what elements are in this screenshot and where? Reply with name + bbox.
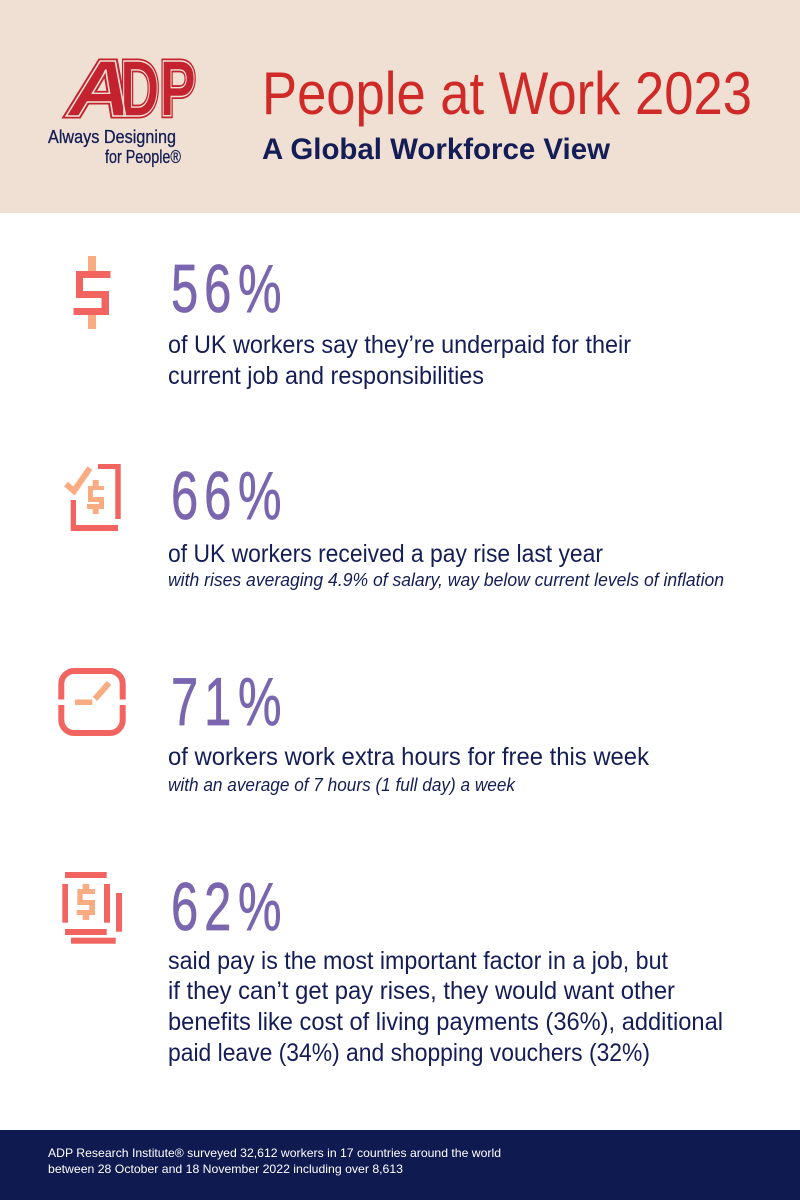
- panel: extra hours stat: [61, 663, 649, 795]
- text: extra hours: with an average of 7 hours (1 full day) a week: [168, 775, 516, 795]
- panel: footer: [0, 1130, 800, 1200]
- text: pay importance: [168, 947, 723, 1067]
- logo tagline: for People®: [105, 147, 181, 167]
- number: 66%: 66%: [171, 457, 281, 534]
- text: underpaid: current job and responsibilities: [168, 362, 484, 390]
- icon: clock: [61, 671, 123, 733]
- icon: dollar sign: [74, 256, 110, 329]
- logo tagline: [48, 127, 181, 167]
- number: 56%: 56%: [171, 250, 281, 327]
- panel: header: [0, 0, 800, 213]
- number: 71%: 71%: [171, 663, 281, 740]
- panel: underpaid stat: [74, 250, 631, 390]
- panel: pay rise stat: [66, 457, 724, 590]
- logo: ADP: DP: [120, 44, 196, 133]
- text: extra hours: [168, 743, 649, 795]
- logo: ADP: A: [66, 44, 132, 133]
- logo tagline: Always Designing: [48, 127, 176, 147]
- footer note: ADP Research Institute® surveyed 32,612 workers in 17 countries around the world: [48, 1146, 501, 1160]
- logo: ADP: DP: [120, 44, 196, 133]
- footer note: [48, 1146, 501, 1176]
- subtitle: A Global Workforce View: [262, 133, 611, 166]
- text: underpaid: [168, 331, 631, 390]
- text: extra hours: of workers work extra hours for free this week: [168, 743, 649, 771]
- text: pay rise: with rises averaging 4.9% of salary, way below current levels of inflation: [168, 570, 724, 590]
- text: pay importance: benefits like cost of living payments (36%), additional: [168, 1008, 723, 1036]
- icon: pay check document: [66, 464, 121, 531]
- number: 62%: 62%: [171, 868, 281, 945]
- logo: ADP: [66, 44, 196, 133]
- logo: ADP: A: [66, 44, 132, 133]
- icon: stacked banknotes: [62, 872, 122, 944]
- footer note: between 28 October and 18 November 2022 including over 8,613: [48, 1162, 403, 1176]
- text: pay importance: if they can’t get pay rises, they would want other: [168, 977, 675, 1005]
- text: pay importance: said pay is the most important factor in a job, but: [168, 947, 668, 975]
- text: underpaid: of UK workers say they’re underpaid for their: [168, 331, 631, 359]
- text: pay rise: of UK workers received a pay rise last year: [168, 540, 603, 568]
- text: pay rise: [168, 540, 724, 590]
- panel: pay importance stat: [62, 868, 723, 1067]
- text: pay importance: paid leave (34%) and shopping vouchers (32%): [168, 1039, 650, 1067]
